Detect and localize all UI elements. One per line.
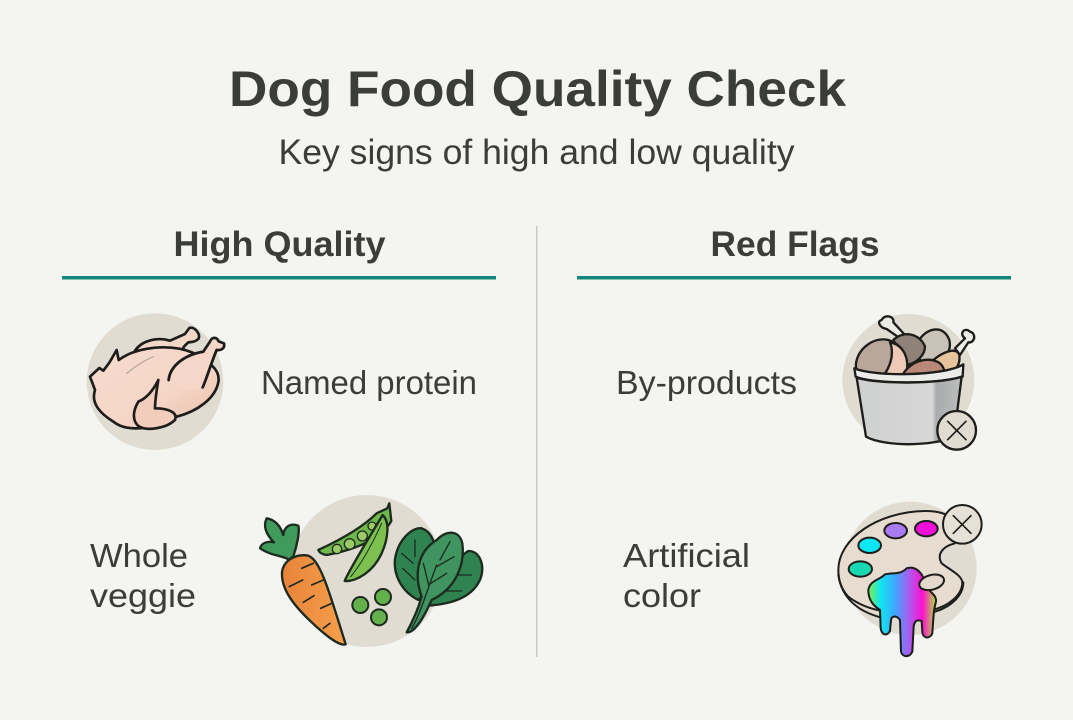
pea pod upper [318, 503, 391, 555]
subtitle: Key signs of high and low quality [278, 133, 795, 172]
label: by-products: By-products [616, 364, 797, 401]
carrot [282, 555, 346, 645]
icon: vegetables [260, 495, 482, 647]
label: whole veggie [90, 537, 196, 614]
heading: high quality: High Quality [174, 225, 386, 264]
thumb hole [918, 572, 946, 593]
loose peas [352, 589, 391, 625]
spinach [427, 551, 482, 606]
no icon [937, 411, 976, 450]
paint wells [849, 561, 872, 577]
label: artificial color: color [623, 577, 701, 614]
label: whole veggie: Whole [90, 537, 188, 574]
pea pod lower [345, 515, 387, 581]
center divider [536, 226, 538, 657]
icon: bucket of by-products [842, 314, 976, 450]
carrot leaves [260, 518, 299, 560]
panel: high quality [62, 225, 496, 647]
label: artificial color [623, 537, 750, 614]
icon: chicken [87, 313, 224, 450]
heading: red flags: Red Flags [710, 225, 880, 264]
no icon [943, 505, 982, 544]
label: artificial color: Artificial [623, 537, 750, 574]
heading underline [62, 276, 496, 280]
panel: red flags [577, 225, 1011, 656]
icon: paint palette [838, 502, 982, 656]
label: whole veggie: veggie [90, 577, 196, 614]
heading underline [577, 276, 1011, 280]
peas in pod [332, 522, 376, 554]
title: Dog Food Quality Check [229, 61, 846, 117]
label: named protein: Named protein [261, 364, 477, 401]
rainbow drip [868, 568, 936, 656]
